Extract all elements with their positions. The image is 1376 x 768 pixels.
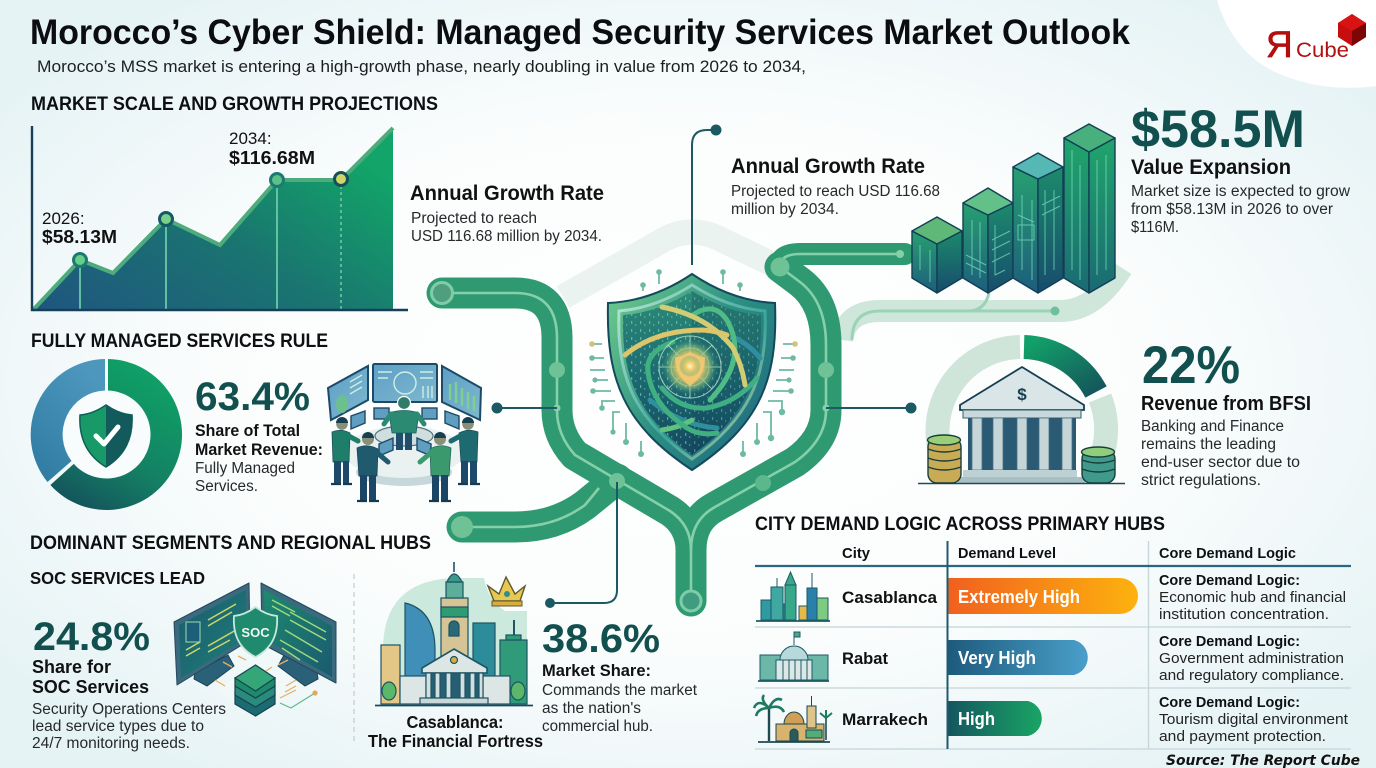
logo: Я xyxy=(1266,24,1293,65)
stat: value expansion xyxy=(1131,100,1351,236)
section heading: market scale: MARKET SCALE AND GROWTH PROJECTIONS xyxy=(31,94,438,115)
area chart: market growth xyxy=(32,126,408,310)
label: 2034 value xyxy=(229,129,315,168)
bar: very high: Very High xyxy=(958,648,1036,668)
person: front-left operator xyxy=(357,432,388,501)
stat: value expansion: from $58.13M in 2026 to over xyxy=(1131,201,1333,218)
bar: extremely high: Extremely High xyxy=(958,587,1080,607)
row: Casablanca: institution concentration. xyxy=(1159,606,1329,623)
stat: value expansion: Value Expansion xyxy=(1131,156,1291,179)
person: centre operator xyxy=(384,396,424,450)
icon: bank with ring gauge xyxy=(918,347,1125,484)
stat: SOC share: 24/7 monitoring needs. xyxy=(32,735,190,752)
subtitle: Morocco’s MSS market is entering a high-growth phase, nearly doubling in value from 2026 to 2034, xyxy=(37,57,806,76)
row: Rabat xyxy=(758,632,1344,684)
table header: Demand Level xyxy=(958,545,1056,562)
stat: Casablanca market share: Commands the market xyxy=(542,682,698,699)
stat: value expansion: $58.5M xyxy=(1131,100,1305,159)
stat: SOC share: SOC Services xyxy=(32,677,149,697)
table header xyxy=(842,545,1296,562)
bar: very high xyxy=(947,640,1088,675)
stat: SOC share: 24.8% xyxy=(33,615,150,659)
stat: SOC share xyxy=(32,615,226,752)
section heading: dominant segments: DOMINANT SEGMENTS AND REGIONAL HUBS xyxy=(30,533,431,554)
icon: Casablanca skyline xyxy=(368,562,543,751)
title: Morocco’s Cyber Shield: Managed Security Services Market Outlook xyxy=(30,12,1130,52)
icon: check shield xyxy=(80,405,132,467)
text: annual growth rate left: Projected to reach xyxy=(411,210,537,227)
stat: value expansion: Market size is expected to grow xyxy=(1131,183,1351,200)
text: annual growth rate left xyxy=(410,182,604,245)
row: Marrakech: Marrakech xyxy=(842,710,928,729)
label: 2026 value: 2026: xyxy=(42,209,85,228)
stat: 63.4 percent: Services. xyxy=(195,478,258,495)
text: annual growth rate centre: million by 2034. xyxy=(731,201,839,218)
stat: revenue from BFSI: end-user sector due to xyxy=(1141,454,1300,471)
central circuit network xyxy=(432,232,1122,611)
connector lines xyxy=(492,126,916,607)
stat: Casablanca market share: as the nation's xyxy=(542,700,641,717)
logo: Cube xyxy=(1296,38,1349,62)
icon: SOC shield xyxy=(234,607,277,657)
person: right operator xyxy=(451,417,480,484)
caption: Casablanca xyxy=(368,712,543,751)
text: annual growth rate left: USD 116.68 million by 2034. xyxy=(411,228,602,245)
label: 2034 value: $116.68M xyxy=(229,147,315,168)
icon: Rabat government building xyxy=(758,632,829,681)
stat: SOC share: Share for xyxy=(32,657,111,677)
bar: high xyxy=(947,701,1042,736)
person: left operator xyxy=(331,417,358,484)
bar: high: High xyxy=(958,709,995,729)
caption: Casablanca: Casablanca: xyxy=(406,712,504,732)
row: Rabat: Rabat xyxy=(842,649,888,668)
row: Marrakech xyxy=(754,694,1349,745)
stat: Casablanca market share xyxy=(542,617,698,735)
stat: 63.4 percent xyxy=(195,375,323,495)
stat: revenue from BFSI: 22% xyxy=(1142,336,1240,395)
icon: operators at monitors xyxy=(328,364,481,501)
text: annual growth rate left: Annual Growth Rate xyxy=(410,182,604,205)
table header: Core Demand Logic xyxy=(1159,545,1296,562)
icon: crown xyxy=(488,577,525,606)
logo xyxy=(1217,0,1376,88)
row: Rabat: Government administration xyxy=(1159,650,1344,667)
row: Casablanca: Core Demand Logic: xyxy=(1159,572,1300,589)
stat: value expansion: $116M. xyxy=(1131,219,1179,236)
stat: 63.4 percent: Market Revenue: xyxy=(195,440,323,459)
stat: Casablanca market share: Market Share: xyxy=(542,661,651,680)
row: Casablanca: Economic hub and financial xyxy=(1159,589,1346,606)
row: Rabat: Core Demand Logic: xyxy=(1159,633,1300,650)
stat: SOC share: lead service types due to xyxy=(32,718,204,735)
stat: revenue from BFSI: strict regulations. xyxy=(1141,472,1261,489)
stat: Casablanca market share: 38.6% xyxy=(542,617,660,661)
section heading: city demand: CITY DEMAND LOGIC ACROSS PRIMARY HUBS xyxy=(755,514,1165,535)
stat: revenue from BFSI: Banking and Finance xyxy=(1141,418,1284,435)
icon: isometric server bars xyxy=(912,124,1115,293)
icon: Marrakech palms and mosque xyxy=(754,695,832,742)
stat: revenue from BFSI xyxy=(1141,336,1311,489)
row: Rabat: and regulatory compliance. xyxy=(1159,667,1344,684)
row: Marrakech: Tourism digital environment xyxy=(1159,711,1349,728)
text: annual growth rate centre: Projected to reach USD 116.68 xyxy=(731,183,940,200)
text: annual growth rate centre: Annual Growth Rate xyxy=(731,155,925,178)
icon: Casablanca towers xyxy=(756,572,830,621)
stat: revenue from BFSI: remains the leading xyxy=(1141,436,1276,453)
person: front-right operator xyxy=(420,432,451,501)
stat: 63.4 percent: Share of Total xyxy=(195,421,300,440)
bar: extremely high xyxy=(947,578,1138,614)
stat: revenue from BFSI: Revenue from BFSI xyxy=(1141,393,1311,415)
row: Casablanca: Casablanca xyxy=(842,588,938,607)
text: annual growth rate centre xyxy=(731,155,940,218)
stat: SOC share: Security Operations Centers xyxy=(32,701,226,718)
icon: SOC shield: SOC xyxy=(241,625,270,640)
sub-heading: SOC services lead: SOC SERVICES LEAD xyxy=(30,568,205,588)
section heading: fully managed: FULLY MANAGED SERVICES RULE xyxy=(31,331,328,352)
table: city demand logic xyxy=(754,541,1351,749)
label: 2026 value xyxy=(42,209,117,247)
label: 2026 value: $58.13M xyxy=(42,226,117,247)
donut chart: 63.4 percent xyxy=(31,359,182,510)
caption: Casablanca: The Financial Fortress xyxy=(368,731,543,751)
row: Marrakech: and payment protection. xyxy=(1159,728,1326,745)
central shield icon xyxy=(589,269,798,470)
row: Casablanca xyxy=(756,572,1346,623)
stat: 63.4 percent: 63.4% xyxy=(195,375,310,419)
stat: Casablanca market share: commercial hub. xyxy=(542,718,653,735)
icon: bank with ring gauge: $ xyxy=(1017,385,1027,404)
stat: 63.4 percent: Fully Managed xyxy=(195,460,295,477)
icon: SOC monitors and server xyxy=(174,583,336,716)
row: Marrakech: Core Demand Logic: xyxy=(1159,694,1300,711)
label: 2034 value: 2034: xyxy=(229,129,272,148)
table header: City xyxy=(842,545,871,562)
